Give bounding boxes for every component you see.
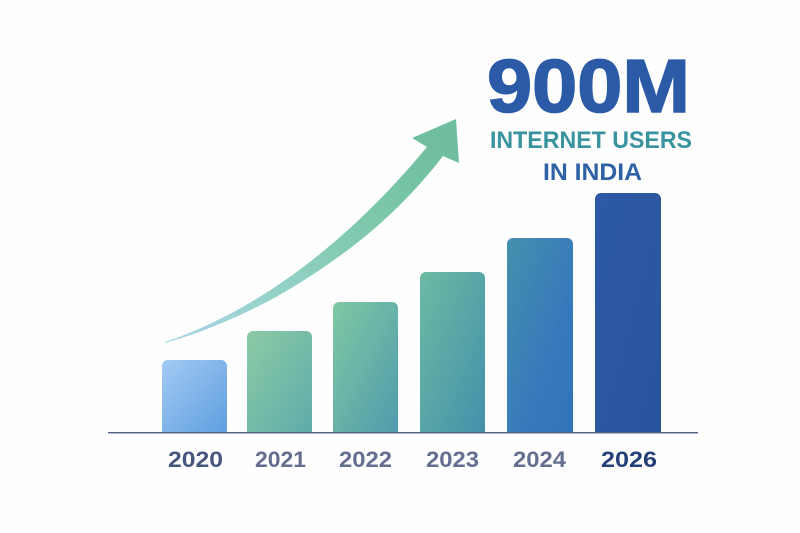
bar 2023: [420, 272, 485, 432]
label 2020: 2020: [168, 447, 223, 472]
bar 2020: [162, 360, 227, 432]
subtitle: internet users in India: IN INDIA: [543, 159, 642, 186]
arrow: growth trend: [165, 119, 459, 343]
label 2021: 2021: [255, 447, 306, 472]
bars: [162, 193, 661, 432]
label 2024: 2024: [513, 447, 567, 472]
label 2023: 2023: [426, 447, 479, 472]
axis line: [108, 432, 698, 433]
subtitle: internet users in India: [490, 127, 692, 186]
label 2022: 2022: [339, 447, 392, 472]
label 2026: 2026: [601, 447, 657, 472]
bar 2022: [333, 302, 398, 432]
bar 2021: [247, 331, 312, 432]
bar 2026: [595, 193, 661, 432]
subtitle: internet users in India: INTERNET USERS: [490, 127, 692, 154]
year labels: [168, 447, 657, 472]
bar 2024: [507, 238, 573, 432]
headline: 900M: 900M: [487, 44, 690, 128]
